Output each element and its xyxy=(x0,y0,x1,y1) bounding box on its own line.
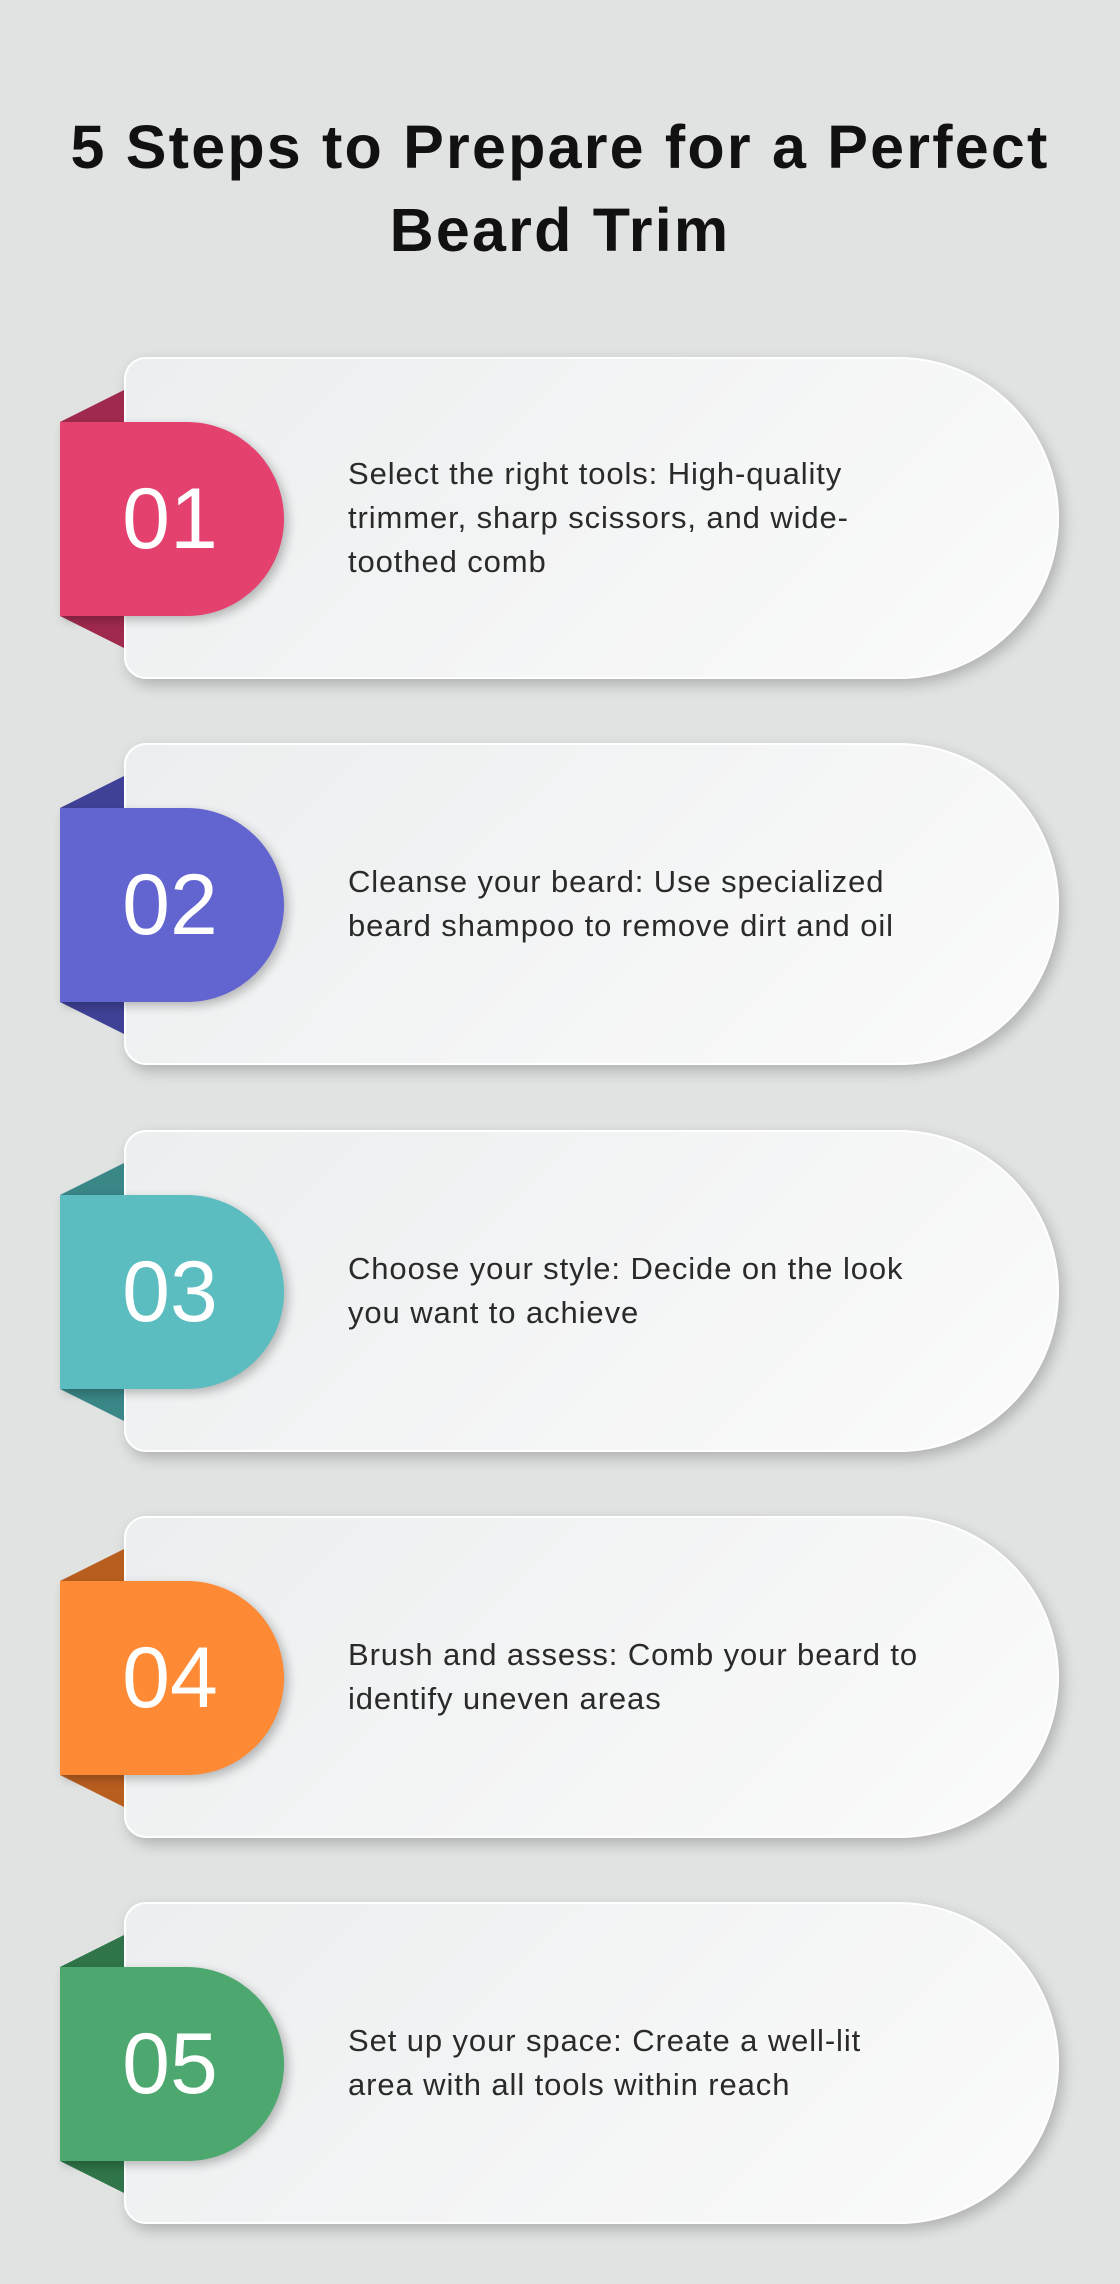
text step 2 xyxy=(348,864,894,943)
text step 2: beard shampoo to remove dirt and oil xyxy=(348,908,894,943)
panel: step 2 xyxy=(59,742,1069,1078)
panel: step 3 xyxy=(59,1130,1069,1464)
badge 01: 01 xyxy=(122,471,218,567)
text step 5: area with all tools within reach xyxy=(348,2067,790,2102)
text step 1: Select the right tools: High-quality xyxy=(348,456,842,491)
text step 2: Cleanse your beard: Use specialized xyxy=(348,864,884,899)
badge 05: 05 xyxy=(122,2016,218,2112)
title xyxy=(71,113,1049,264)
badge 02: 02 xyxy=(122,857,218,953)
text step 4: Brush and assess: Comb your beard to xyxy=(348,1637,918,1672)
badge 01 xyxy=(60,422,284,616)
text step 1 xyxy=(348,456,849,579)
text step 5: Set up your space: Create a well-lit xyxy=(348,2023,861,2058)
title: 5 Steps to Prepare for a Perfect xyxy=(71,113,1049,181)
text step 4 xyxy=(348,1637,918,1716)
text step 1: toothed comb xyxy=(348,544,547,579)
badge 05 xyxy=(60,1967,284,2161)
text step 3: you want to achieve xyxy=(348,1295,639,1330)
badge 04 xyxy=(60,1581,284,1775)
badge 04: 04 xyxy=(122,1630,218,1726)
panel: step 4 xyxy=(59,1516,1069,1850)
text step 1: trimmer, sharp scissors, and wide- xyxy=(348,500,849,535)
badge 03 xyxy=(60,1195,284,1389)
text step 4: identify uneven areas xyxy=(348,1681,662,1716)
text step 5 xyxy=(348,2023,861,2102)
badge 02 xyxy=(60,808,284,1002)
panel: step 1 xyxy=(59,356,1069,692)
text step 3: Choose your style: Decide on the look xyxy=(348,1251,903,1286)
panel: step 5 xyxy=(59,1902,1069,2236)
title: Beard Trim xyxy=(390,196,730,264)
text step 3 xyxy=(348,1251,903,1330)
badge 03: 03 xyxy=(122,1244,218,1340)
